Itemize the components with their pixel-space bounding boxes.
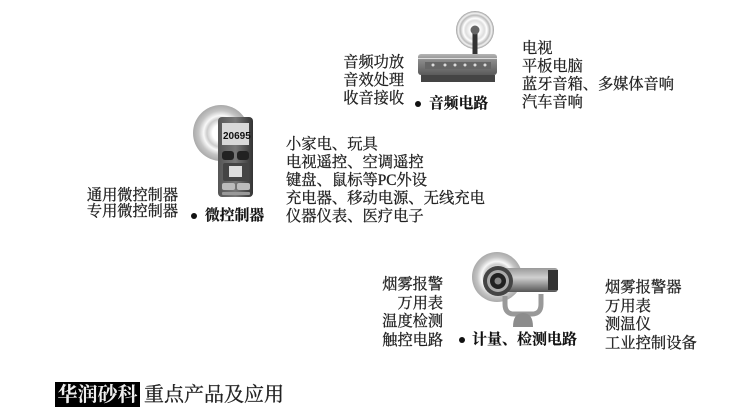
text: microcontroller left list: 通用微控制器 xyxy=(87,187,178,204)
text: measurement left list: 触控电路 xyxy=(382,332,443,348)
icon: handheld meter with waves xyxy=(193,105,253,197)
heading: key products and applications: 华润砂科 xyxy=(58,384,138,406)
text: microcontroller right list: 电视遥控、空调遥控 xyxy=(286,154,424,171)
label: microcontroller: 微控制器 xyxy=(205,208,264,224)
text: microcontroller right list: 仪器仪表、医疗电子 xyxy=(286,208,424,225)
label: measurement and detection circuit: 计量、检测电路 xyxy=(472,332,577,348)
text: measurement left list: 万用表 xyxy=(397,294,443,312)
text: measurement right list: 测温仪 xyxy=(605,316,651,333)
text: measurement left list: 烟雾报警 xyxy=(382,276,443,293)
text: audio circuit left list: 音效处理 xyxy=(343,72,404,89)
heading: key products and applications xyxy=(55,382,284,407)
text: microcontroller right list: 小家电、玩具 xyxy=(286,136,378,153)
icon: router with antenna xyxy=(418,11,497,82)
label: audio circuit: 音频电路 xyxy=(429,96,488,112)
text: measurement right list: 万用表 xyxy=(605,298,651,314)
text: audio circuit right list: 汽车音响 xyxy=(522,94,583,111)
text: microcontroller left list: 专用微控制器 xyxy=(87,203,178,220)
text: audio circuit left list xyxy=(343,54,404,107)
text: audio circuit right list: 蓝牙音箱、多媒体音响 xyxy=(522,76,674,93)
text: microcontroller right list: 充电器、移动电源、无线充电 xyxy=(286,190,485,207)
text: microcontroller right list: 键盘、鼠标等PC外设 xyxy=(286,172,427,189)
text: audio circuit left list: 收音接收 xyxy=(343,90,404,107)
icon: webcam style instrument xyxy=(472,252,558,327)
text: audio circuit right list: 电视 xyxy=(522,40,552,57)
text: measurement right list xyxy=(605,278,697,352)
text: measurement left list xyxy=(382,276,443,348)
text: microcontroller right list xyxy=(286,136,485,225)
heading: key products and applications: 重点产品及应用 xyxy=(144,384,284,406)
text: measurement right list: 工业控制设备 xyxy=(605,334,697,352)
text: measurement left list: 温度检测 xyxy=(382,313,443,330)
text: audio circuit right list: 平板电脑 xyxy=(522,58,583,75)
text: audio circuit left list: 音频功放 xyxy=(343,54,404,71)
text: audio circuit right list xyxy=(522,40,674,111)
icon: handheld meter with waves: 20695 xyxy=(223,131,251,142)
text: measurement right list: 烟雾报警器 xyxy=(605,279,682,296)
text: microcontroller left list xyxy=(87,186,178,220)
